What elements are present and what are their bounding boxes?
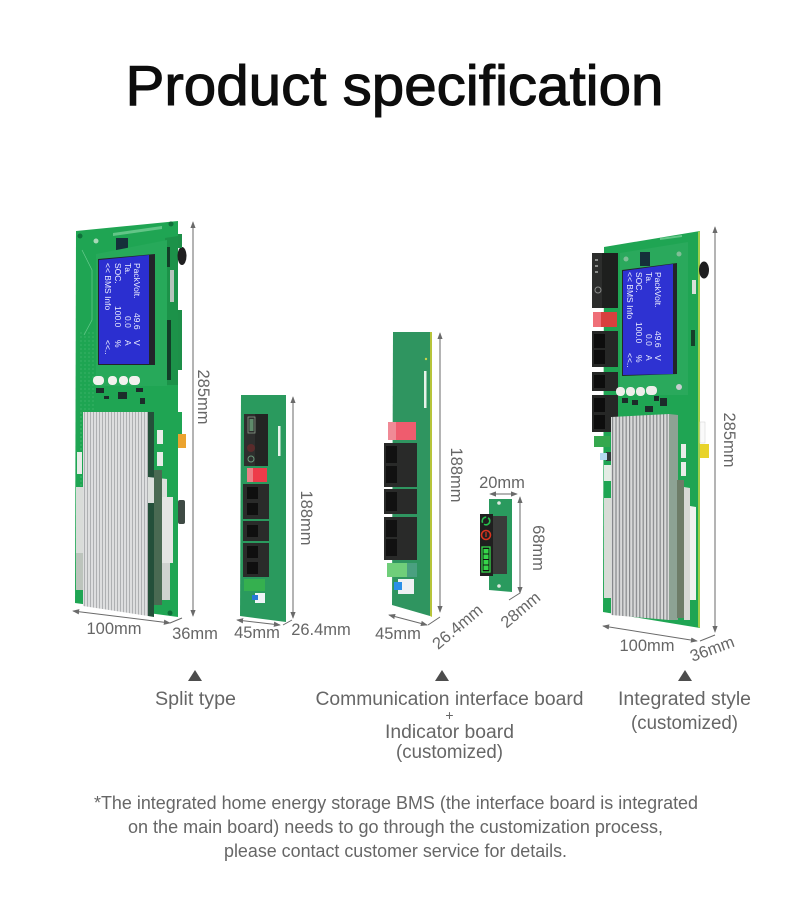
- dimension: 28mm: 28mm: [497, 589, 544, 632]
- dimension: 285mm integrated: 285mm: [720, 412, 738, 468]
- LCD text: <<..: [103, 340, 113, 355]
- LCD text: A: [644, 355, 654, 361]
- LCD text: 49.6: [132, 313, 142, 330]
- panel: integrated style board: [592, 231, 709, 628]
- dimension: 100mm split: 100mm: [86, 620, 142, 638]
- knob: [178, 247, 186, 265]
- DIP switch: [247, 468, 267, 482]
- dimension: 20mm: 20mm: [479, 474, 525, 492]
- LCD text: %: [113, 340, 123, 348]
- dimension: 36mm integrated: 36mm: [688, 633, 737, 666]
- dimension: 188mm board B: 188mm: [447, 447, 465, 503]
- LCD text: 100.0: [634, 322, 644, 344]
- LCD frame: [622, 263, 677, 376]
- LCD text: <<..: [625, 353, 635, 368]
- marker: split type: [188, 670, 202, 681]
- dimension: 188mm board A: 188mm: [297, 490, 315, 546]
- pcb etched detail: [78, 222, 174, 616]
- board: integrated PCB: [603, 231, 700, 628]
- RJ45 jacks: [592, 331, 618, 432]
- label: communication interface board plus indicator board: Communication interface board: [316, 689, 584, 710]
- component cluster: [622, 396, 667, 412]
- LCD text: PackVolt.: [132, 263, 142, 298]
- LCD text: SOC.: [634, 272, 644, 293]
- daughter board traces: [167, 247, 171, 380]
- label: communication interface board plus indicator board: (customized): [396, 742, 503, 763]
- label: integrated style: Integrated style: [618, 689, 751, 710]
- dimension: 45mm board B: [375, 615, 427, 643]
- board A: [240, 395, 286, 622]
- blue switch: [394, 579, 414, 594]
- pcb details: [624, 235, 696, 390]
- label: communication interface board plus indicator board: +: [445, 707, 454, 723]
- dimension: 36mm split: 36mm: [172, 625, 218, 643]
- side tabs: [178, 234, 186, 524]
- LCD text: Ta.: [123, 263, 133, 274]
- LCD text: 0.0: [123, 316, 133, 328]
- display carrier board: [96, 240, 167, 386]
- LCD frame: [98, 254, 155, 365]
- LCD text: 49.6: [653, 331, 663, 348]
- green terminal: [244, 579, 265, 591]
- LCD text: [625, 272, 663, 368]
- marker: communication board: [435, 670, 449, 681]
- footnote: please contact customer service for details.: [224, 841, 567, 861]
- LCD text: 100.0: [113, 306, 123, 328]
- LCD text: PackVolt.: [653, 272, 663, 307]
- label: integrated style: [618, 689, 751, 734]
- LCD screen: [623, 264, 673, 375]
- panel: indicator board: [480, 499, 512, 592]
- small terminals: [681, 444, 686, 476]
- white bar: [278, 426, 280, 456]
- dimension: 68mm: [520, 497, 547, 593]
- icon: green battery: [482, 547, 490, 572]
- dimension: 45mm board B: 45mm: [375, 625, 421, 643]
- RJ45 jacks: [384, 443, 417, 560]
- footnote: [94, 793, 698, 861]
- LCD text: V: [132, 340, 142, 346]
- icon: green cycle: [482, 517, 490, 525]
- LCD text: SOC.: [113, 263, 123, 284]
- indicator cutout connector: [244, 414, 268, 466]
- board B: [392, 332, 430, 616]
- board edge: [430, 332, 432, 617]
- label: communication interface board plus indicator board: [316, 689, 584, 763]
- hole: [425, 358, 427, 360]
- component: right side daughter board: [165, 236, 178, 385]
- footnote: *The integrated home energy storage BMS (the interface board is integrated: [94, 793, 698, 813]
- small terminal blocks: [77, 430, 163, 474]
- LCD text: << BMS Info: [625, 272, 635, 320]
- connector strip: [170, 270, 174, 302]
- mount holes: [497, 501, 501, 588]
- green terminal: [594, 436, 610, 447]
- marker: integrated style: [678, 670, 692, 681]
- LCD text: %: [634, 355, 644, 363]
- board: split main PCB: [75, 221, 178, 617]
- dimension: 100mm integrated: 100mm: [619, 637, 675, 655]
- left terminal strip: [604, 465, 611, 598]
- dimension: 26.4mm board A: 26.4mm: [291, 621, 351, 639]
- title: Product specification: [126, 54, 664, 118]
- black connector: [592, 253, 618, 308]
- LCD text: A: [123, 340, 133, 346]
- label: split type: Split type: [155, 689, 236, 710]
- display carrier board: [620, 242, 688, 395]
- DIP switch: [388, 422, 416, 440]
- dimension: 285mm split: 285mm: [194, 369, 212, 425]
- LCD text: << BMS Info: [103, 263, 113, 311]
- dimension: 26.4mm board B: 26.4mm: [429, 601, 486, 653]
- heatsink: [611, 414, 678, 620]
- black connector body: [480, 514, 507, 576]
- side tabs: [700, 422, 709, 458]
- panel: communication interface board front: [240, 395, 286, 622]
- label: communication interface board plus indicator board: Indicator board: [385, 722, 514, 743]
- LCD text: 0.0: [644, 334, 654, 346]
- dimension: 45mm board A: 45mm: [234, 624, 280, 642]
- icon: red power: [482, 530, 490, 540]
- component cluster: [96, 388, 145, 404]
- dimension: 100mm integrated: [603, 626, 697, 655]
- buttons: [616, 386, 657, 396]
- LCD text: Ta.: [644, 272, 654, 283]
- dimension: 68mm: 68mm: [529, 525, 547, 571]
- knob: [699, 262, 709, 278]
- dimension: 100mm split: [73, 611, 170, 638]
- footnote: on the main board) needs to go through the customization process,: [128, 817, 663, 837]
- blue switch: [600, 452, 611, 461]
- panel: split type main board: [75, 221, 186, 617]
- LCD text: [103, 263, 142, 355]
- bus bars: [76, 470, 173, 605]
- heatsink: [83, 412, 154, 617]
- indicator PCB: [489, 499, 512, 592]
- DIP switch: [593, 312, 617, 327]
- panel: communication interface board angled: [384, 332, 432, 617]
- label: integrated style: (customized): [631, 713, 738, 734]
- bus bars: [677, 480, 696, 620]
- LCD text: V: [653, 355, 663, 361]
- blue switch: [252, 593, 265, 603]
- green terminal: [387, 563, 417, 577]
- RJ45 jacks: [243, 484, 269, 577]
- LCD screen: [99, 255, 149, 364]
- buttons: [93, 376, 140, 385]
- board edge highlight: [698, 231, 700, 628]
- dimension: 36mm split: [170, 618, 218, 643]
- white bar: [424, 371, 426, 408]
